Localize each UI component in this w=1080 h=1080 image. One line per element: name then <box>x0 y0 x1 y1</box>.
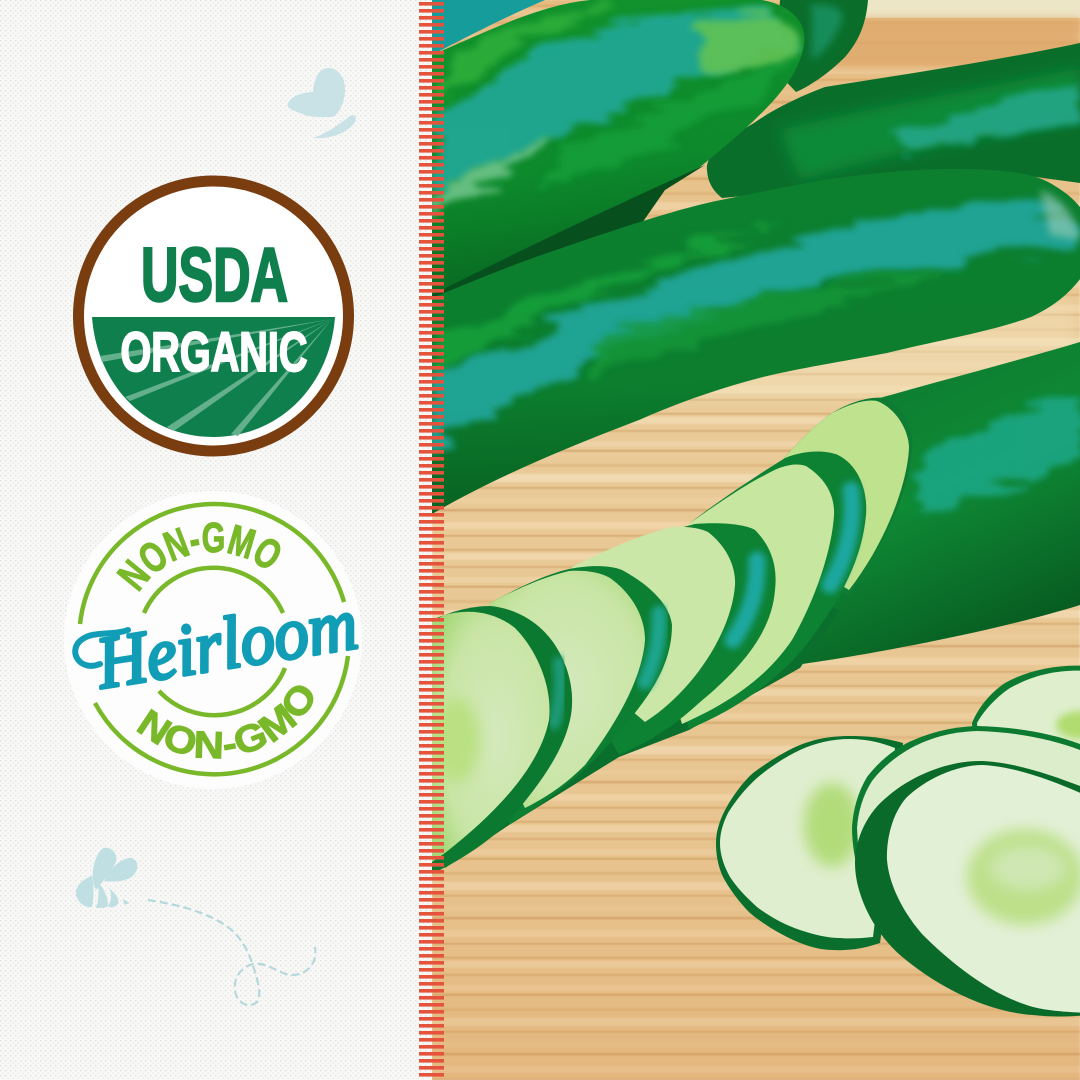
cucumber round slice: far right <box>972 666 1080 744</box>
red striped divider <box>419 0 444 1080</box>
badge script Heirloom: Heirloom <box>90 583 363 705</box>
badge text NON-GMO top: NON-GMO <box>116 522 280 592</box>
badge outer ring <box>80 504 348 774</box>
badge: Heirloom Non-GMO <box>65 491 363 789</box>
cucumber: top right <box>707 43 1080 198</box>
badge inner ring <box>144 568 285 715</box>
badge script swash <box>75 630 128 666</box>
cucumber slice 2 <box>470 566 672 825</box>
panel: cucumber photo <box>432 0 1080 1080</box>
badge: USDA Organic <box>78 181 348 451</box>
cucumber: lower right body <box>795 342 1080 665</box>
badge title USDA: USDA <box>141 233 288 318</box>
badge field rays <box>100 319 332 436</box>
cucumber: back top <box>775 0 868 92</box>
cucumber slice 4 <box>680 452 866 729</box>
cucumber: top left <box>432 0 805 295</box>
badge green field <box>92 317 335 437</box>
shadow under top-left cucumber <box>432 165 705 310</box>
cucumber round slice: left <box>716 736 903 950</box>
badge ring <box>78 181 348 451</box>
badge text NON-GMO bottom: NON-GMO <box>136 685 314 759</box>
cucumber slice 3 <box>560 523 776 755</box>
wooden cutting board <box>432 0 1080 1080</box>
icon: bee <box>76 848 137 908</box>
cucumber slice 5 <box>784 398 912 596</box>
panel: linen background <box>0 0 432 1080</box>
cucumber slice 1 <box>432 606 572 874</box>
cucumber round slice: middle back <box>852 726 1080 860</box>
cucumber: middle whole <box>432 169 1080 514</box>
badge white halo <box>64 491 362 789</box>
backing rind along slices <box>445 608 839 868</box>
cucumber: teal background corner <box>432 0 545 55</box>
cucumber round slice: front <box>855 761 1080 1016</box>
icon: butterfly top <box>288 68 356 138</box>
bee flight trail <box>148 900 315 1005</box>
badge subtitle ORGANIC: ORGANIC <box>120 320 308 383</box>
